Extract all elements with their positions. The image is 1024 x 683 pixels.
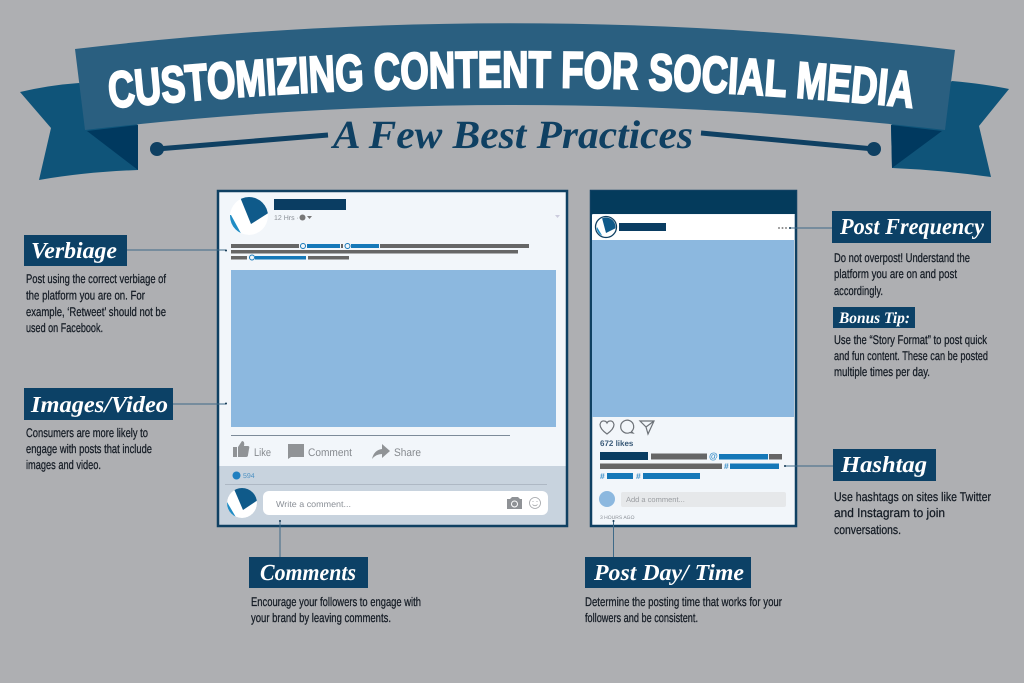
body text (26, 272, 166, 335)
heading: Post Frequency (839, 214, 985, 239)
icon: more dots (778, 227, 787, 229)
caption bars: @ (709, 451, 718, 461)
profile row (592, 215, 794, 240)
callout: Post Day/Time (585, 520, 782, 625)
profile name bar (274, 199, 346, 210)
body text: the platform you are on. For (26, 288, 145, 302)
body text: accordingly. (834, 284, 883, 298)
banner band (75, 23, 955, 130)
icon: heart (600, 421, 614, 434)
title: CUSTOMIZING CONTENT FOR SOCIAL MEDIA (108, 50, 913, 109)
body text: example, ‘Retweet’ should not be (26, 305, 166, 319)
comment avatar (599, 491, 615, 507)
body text (585, 595, 782, 625)
body text: platform you are on and post (834, 267, 957, 281)
timestamp: 12 Hrs · (274, 215, 299, 222)
like count: 672 likes (600, 439, 634, 448)
heading: Images/Video (30, 392, 168, 417)
body text: Use hashtags on sites like Twitter (834, 490, 991, 504)
subtitle: A Few Best Practices (330, 112, 693, 157)
icon: smiley (530, 498, 540, 508)
icon: send (640, 421, 654, 434)
comment placeholder: Add a comment... (626, 495, 685, 504)
left ribbon tail (20, 83, 138, 180)
body text: and Instagram to join (834, 506, 945, 520)
body text: images and video. (26, 458, 101, 472)
icon: profile avatar (230, 197, 268, 235)
callout: Comments (249, 520, 421, 625)
heading: Verbiage (31, 238, 117, 263)
icon: globe (300, 214, 306, 220)
heading: Hashtag (840, 452, 927, 477)
icon: comment bubble (288, 444, 304, 459)
image placeholder (592, 240, 794, 417)
like label: Like (254, 447, 271, 459)
comment placeholder: Write a comment... (276, 499, 351, 509)
title banner (20, 23, 1009, 180)
right ribbon fold (891, 125, 942, 168)
post text bars (231, 244, 529, 260)
body text: multiple times per day. (834, 365, 930, 379)
body text: Encourage your followers to engage with (251, 595, 421, 609)
caption bars: # (636, 471, 641, 481)
body text (251, 595, 421, 625)
share label: Share (394, 447, 421, 459)
body text: used on Facebook. (26, 321, 103, 335)
icon: like count badge (232, 472, 240, 480)
right ribbon tail (891, 81, 1009, 177)
callout: Verbiage (24, 235, 227, 335)
caption bars (600, 451, 782, 481)
image placeholder (231, 270, 556, 427)
body text: engage with posts that include (26, 442, 152, 456)
callout: Post Frequency (789, 211, 991, 298)
heading: Bonus Tip: (838, 310, 910, 327)
comment label: Comment (308, 447, 352, 459)
heading: Post Day/ Time (593, 560, 744, 585)
body text: conversations. (834, 523, 901, 537)
body text: followers and be consistent. (585, 611, 698, 625)
subtitle with rule (150, 112, 881, 157)
comment input (263, 491, 548, 515)
body text (834, 490, 991, 537)
icon: share arrow (372, 444, 390, 459)
left ribbon fold (87, 125, 138, 170)
body text: Determine the posting time that works for your (585, 595, 782, 609)
icon: comment avatar (227, 488, 257, 518)
body text (26, 426, 152, 472)
panel: Instagram post mockup (591, 191, 796, 526)
body text (834, 333, 988, 379)
body text: Do not overpost! Understand the (834, 251, 970, 265)
profile name bar (619, 223, 666, 231)
callout: Hashtag (784, 449, 991, 537)
heading: Comments (260, 560, 356, 585)
callout: Bonus Tip (833, 307, 988, 379)
panel: Facebook post mockup (218, 191, 567, 526)
body text (834, 251, 970, 298)
body text: your brand by leaving comments. (251, 611, 391, 625)
body text: Post using the correct verbiage of (26, 272, 166, 286)
icon: camera (507, 497, 522, 509)
caption bars: # (600, 471, 605, 481)
body text: Consumers are more likely to (26, 426, 148, 440)
like count: 594 (243, 473, 255, 480)
comment input (621, 492, 786, 507)
caption bars: # (724, 461, 729, 471)
icon: comment (621, 420, 634, 433)
callout: Images/Video (24, 388, 227, 472)
icon: like thumb (233, 441, 249, 457)
timestamp: 3 HOURS AGO (600, 515, 635, 521)
icon: profile avatar (594, 216, 618, 240)
top app bar (591, 191, 796, 214)
